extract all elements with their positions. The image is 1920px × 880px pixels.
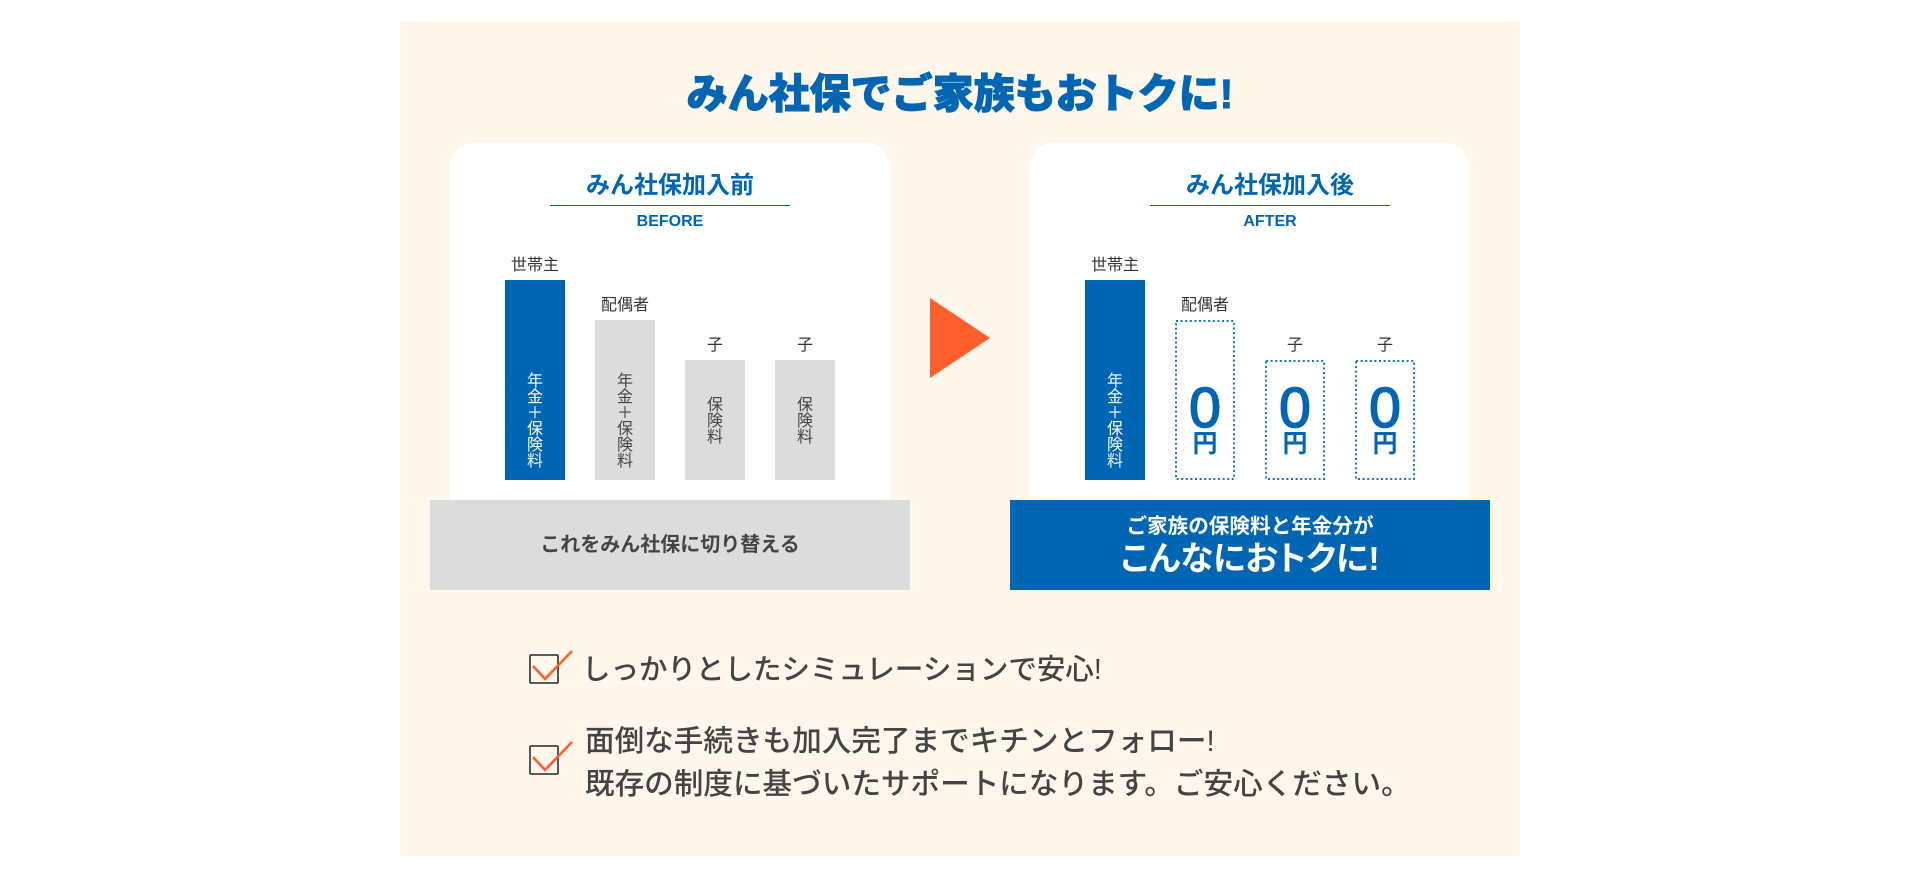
label: spouse: 配偶者 [601,297,649,314]
bar: household head [505,280,565,480]
label: child: 子 [1287,337,1303,354]
bar: child zero [1265,360,1325,480]
label: AFTER: AFTER [1243,213,1297,230]
icon: check two [529,741,573,775]
text: simulation: しっかりとしたシミュレーションで安心! [582,654,1102,686]
callout text: switch: これをみん社保に切り替える [540,534,800,556]
label: child: 子 [797,337,813,354]
callout: switch [430,500,910,590]
bar: spouse zero [1175,320,1235,480]
bar text: pension plus insurance: 年金＋保険料 [614,372,631,468]
label: child: 子 [1377,337,1393,354]
value: child zero: 0 [1279,376,1311,440]
title: みん社保でご家族もおトクに! [687,71,1233,117]
bar text: pension plus insurance: 年金＋保険料 [524,372,541,468]
heading: before: みん社保加入前 [586,172,754,199]
label: child: 子 [707,337,723,354]
callout text: savings line one: ご家族の保険料と年金分が [1126,515,1374,538]
heading: after: みん社保加入後 [1186,172,1354,199]
bar text: pension plus insurance: 年金＋保険料 [1104,372,1121,468]
value: child zero: 0 [1369,376,1401,440]
unit: yen: 円 [1192,430,1218,458]
bar: spouse [595,320,655,480]
bar: household head [1085,280,1145,480]
bar text: insurance: 保険料 [704,396,721,444]
unit: yen: 円 [1372,430,1398,458]
label: household head: 世帯主 [511,257,559,274]
bar: child [775,360,835,480]
bar text: insurance: 保険料 [794,396,811,444]
callout text: savings line two: こんなにおトクに! [1120,541,1380,578]
heading rule: before [550,205,790,206]
heading rule: after [1150,205,1390,206]
label: household head: 世帯主 [1091,257,1139,274]
arrow [930,298,990,378]
callout: savings [1010,500,1490,590]
panel: before [450,143,890,503]
unit: yen: 円 [1282,430,1308,458]
bar: child [685,360,745,480]
icon: check one [529,650,573,684]
text: support: 既存の制度に基づいたサポートになります。ご安心ください。 [585,768,1411,801]
text: support [585,725,1411,801]
label: BEFORE: BEFORE [637,213,703,230]
bar: child zero [1355,360,1415,480]
label: spouse: 配偶者 [1181,297,1229,314]
value: spouse zero: 0 [1189,376,1221,440]
panel: background [400,22,1520,856]
text: support: 面倒な手続きも加入完了までキチンとフォロー! [585,725,1215,758]
panel: after [1030,143,1469,503]
